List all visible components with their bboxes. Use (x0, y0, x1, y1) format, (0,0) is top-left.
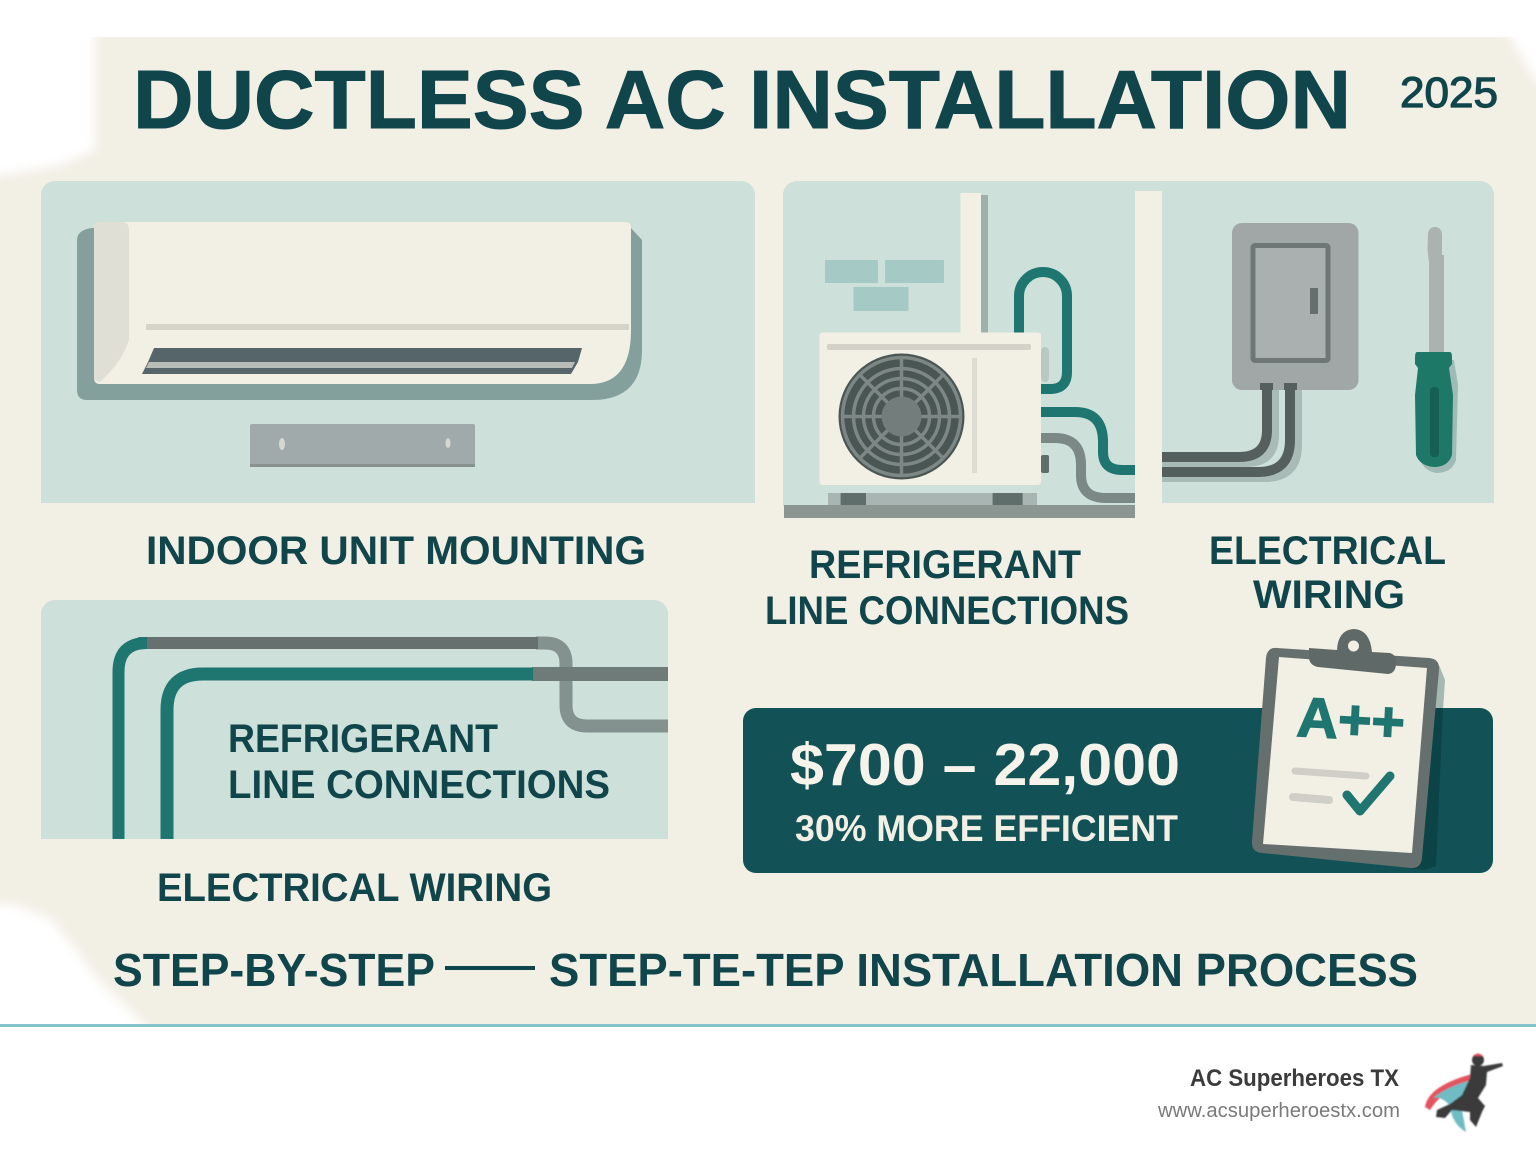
price: $700 – 22,000 (790, 732, 1180, 798)
electrical wires (1162, 385, 1297, 477)
label: electrical wiring: WIRING (1253, 573, 1405, 617)
year: 2025 (1400, 69, 1498, 117)
efficiency: 30% MORE EFFICIENT (795, 808, 1178, 849)
label: electrical wiring: ELECTRICAL (1209, 529, 1446, 573)
icon: outdoor unit (820, 332, 1041, 485)
icon: superhero logo (1425, 1054, 1503, 1132)
label: electrical wiring lower: ELECTRICAL WIRING (157, 866, 552, 910)
panel: refrigerant lines (41, 600, 668, 839)
label: refrigerant line connections (765, 543, 1129, 633)
panel text: REFRIGERANT (228, 717, 498, 761)
refrigerant loop and lines (1019, 272, 1136, 498)
refrigerant line pipes (118, 643, 668, 839)
icon: indoor AC unit (77, 222, 642, 400)
label: refrigerant line connections: REFRIGERANT (809, 543, 1081, 587)
icon: fan grille (838, 354, 964, 480)
panel text: LINE CONNECTIONS (228, 763, 610, 807)
grade: A++ (1295, 685, 1407, 754)
panel: indoor unit mounting (41, 181, 755, 503)
label: refrigerant line connections: LINE CONNECTIONS (765, 589, 1129, 633)
icon: screwdriver (1415, 227, 1458, 473)
brand url: www.acsuperheroestx.com (1157, 1100, 1400, 1122)
note lines (1293, 771, 1366, 800)
icon: bricks (825, 260, 944, 311)
icon: mounting bracket (250, 424, 475, 467)
ground slab (784, 505, 1135, 518)
title: DUCTLESS AC INSTALLATION (133, 53, 1351, 146)
panel: price banner (743, 708, 1493, 873)
label: indoor unit mounting: INDOOR UNIT MOUNTING (146, 529, 646, 573)
clipboard clip (1309, 629, 1396, 674)
wall mast (960, 193, 988, 335)
brand name: AC Superheroes TX (1190, 1065, 1399, 1092)
footer process heading: STEP-BY-STEP (113, 944, 435, 996)
panel: outdoor unit and electrical (783, 181, 1494, 521)
label: electrical wiring (1209, 529, 1446, 617)
icon: clipboard (1252, 629, 1445, 870)
panel text (228, 717, 610, 807)
footer process heading (113, 944, 1418, 996)
check mark (1347, 776, 1390, 811)
footer process heading: STEP-TE-TEP INSTALLATION PROCESS (549, 944, 1418, 996)
icon: electrical panel (1232, 223, 1358, 390)
outdoor unit feet (828, 347, 1049, 505)
divider pillar (1135, 191, 1162, 521)
